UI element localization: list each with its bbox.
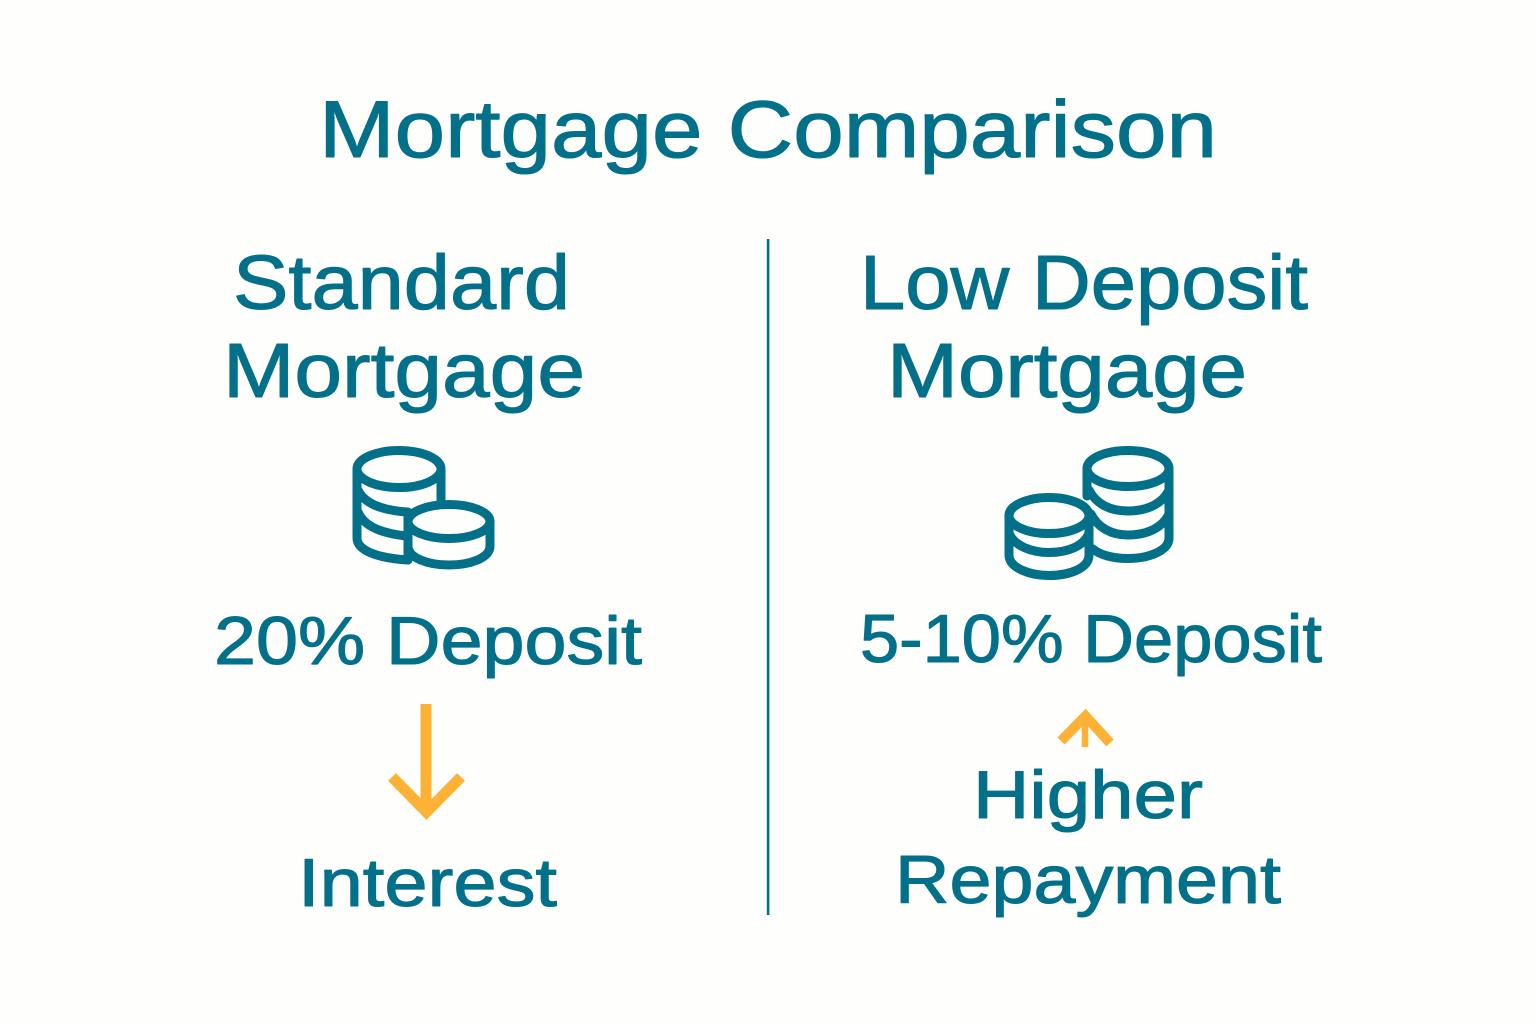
outcome label: higher repayment <box>895 757 1281 918</box>
icon: coin stacks, large stack left <box>357 450 490 565</box>
heading: standard mortgage: Mortgage <box>223 328 585 414</box>
deposit label: 20% deposit: 20% Deposit <box>214 603 642 679</box>
heading: standard mortgage: Standard <box>233 240 570 326</box>
deposit label: 5-10% deposit: 5-10% Deposit <box>860 601 1322 677</box>
panel: low deposit mortgage <box>860 240 1322 918</box>
arrow: down, lower interest <box>392 704 461 812</box>
heading: low deposit mortgage: Mortgage <box>887 328 1247 414</box>
arrow: up, higher repayment <box>1061 716 1110 747</box>
outcome label: higher repayment: Higher <box>973 757 1203 833</box>
heading: low deposit mortgage <box>860 240 1308 414</box>
center divider <box>767 239 769 915</box>
heading: standard mortgage <box>223 240 585 414</box>
heading: low deposit mortgage: Low Deposit <box>860 240 1308 326</box>
outcome label: interest: Interest <box>298 845 557 921</box>
panel: standard mortgage <box>214 240 642 921</box>
outcome label: higher repayment: Repayment <box>895 842 1281 918</box>
title: Mortgage Comparison <box>319 85 1217 175</box>
icon: coin stacks, large stack right <box>1009 450 1169 576</box>
